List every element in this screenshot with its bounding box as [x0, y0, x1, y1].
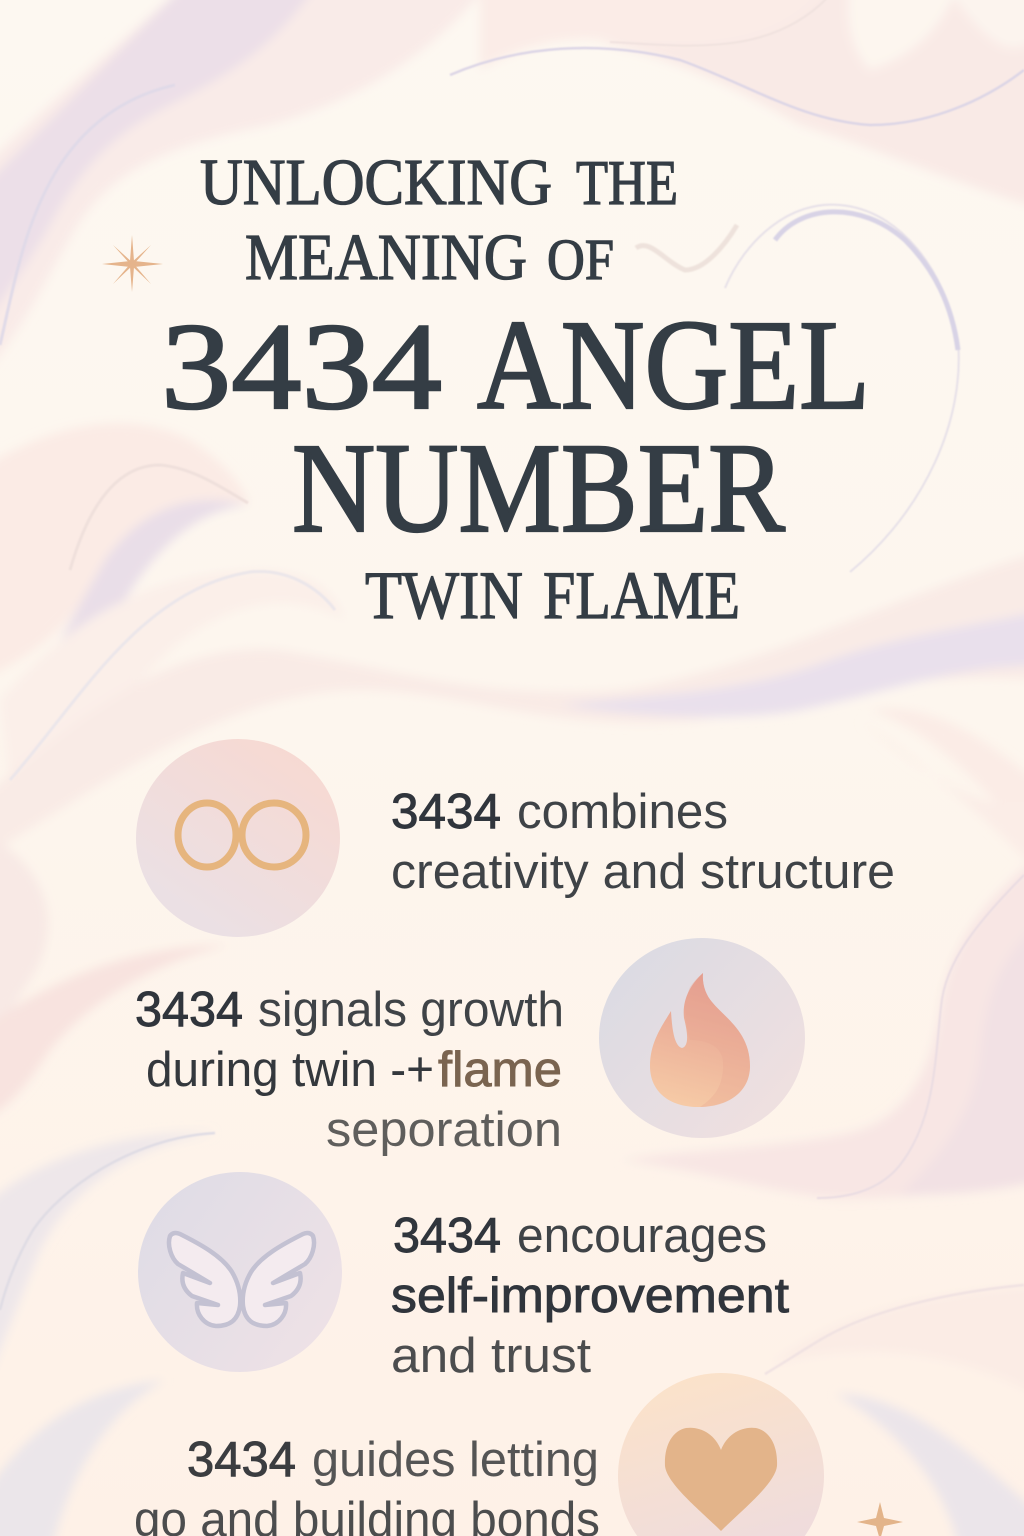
text: item 3 — [391, 1209, 789, 1383]
icon circle: infinity — [136, 739, 340, 937]
text: item 1: creativity and structure — [391, 845, 895, 899]
text: item 3: self-improvement — [391, 1269, 789, 1323]
icon: sparkle top left — [102, 235, 163, 292]
text: item 1: 3434 — [391, 785, 501, 839]
item 1: creativity and structure — [136, 739, 895, 937]
title line: meaning of: OF — [547, 227, 614, 292]
title line: twin flame — [365, 557, 740, 633]
title line: twin flame: TWIN — [365, 557, 523, 633]
title line: 3434 angel — [161, 294, 870, 436]
item 2: growth during separation — [135, 938, 805, 1157]
top right — [480, 0, 830, 70]
text: item 3: 3434 — [393, 1209, 501, 1263]
icon circle: flame — [599, 938, 805, 1138]
text: item 1: combines — [517, 785, 728, 839]
title line: meaning of: MEANING — [245, 221, 527, 294]
item 3: self-improvement and trust — [138, 1172, 789, 1383]
left lower — [0, 830, 48, 1060]
wave — [0, 550, 1024, 860]
text: item 4: guides letting — [312, 1433, 599, 1487]
icon circle: wings — [138, 1172, 342, 1372]
text: item 2: signals growth — [258, 983, 564, 1037]
text: item 3: encourages — [517, 1209, 767, 1263]
title line: twin flame: FLAME — [543, 557, 740, 633]
title line: number: NUMBER — [292, 417, 786, 559]
right bottom — [836, 1394, 1024, 1536]
text: item 2 — [135, 983, 564, 1157]
item 4: letting go and building bonds — [134, 1373, 824, 1536]
title line: 3434 angel: 3434 — [161, 298, 442, 435]
title — [161, 146, 870, 633]
right lower — [620, 850, 1024, 1198]
left middle — [0, 423, 250, 680]
text: item 2: 3434 — [135, 983, 243, 1037]
top left — [0, 0, 490, 380]
text: item 4 — [134, 1433, 600, 1536]
title line: unlocking the: UNLOCKING — [200, 146, 552, 219]
icon circle: heart — [618, 1373, 824, 1536]
text: item 4: 3434 — [187, 1433, 296, 1487]
text: item 2: during twin -+ — [146, 1043, 434, 1097]
title line: unlocking the: THE — [576, 147, 678, 218]
text: item 2: flame — [438, 1043, 562, 1097]
title line: 3434 angel: ANGEL — [477, 294, 870, 436]
text: item 1 — [391, 785, 895, 899]
text: item 3: and trust — [391, 1329, 591, 1383]
icon: sparkle bottom right — [857, 1502, 903, 1536]
text: item 2: seporation — [326, 1103, 562, 1157]
